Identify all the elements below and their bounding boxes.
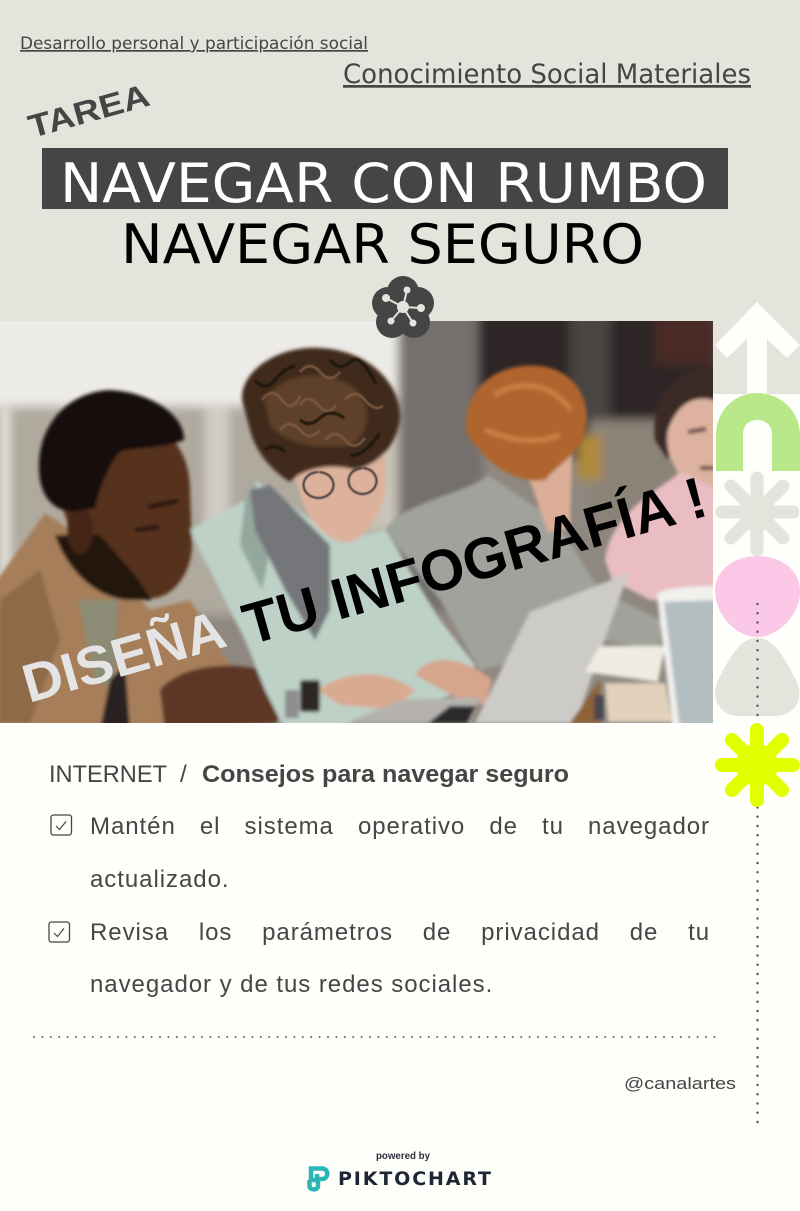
icon: checkbox 1 [51,815,72,835]
subject heading: Desarrollo personal y participación social [20,34,368,54]
tablet [656,584,713,723]
tips heading: Consejos para navegar seguro [202,761,569,788]
redhead woman [385,475,660,670]
tips heading: / [180,761,187,788]
curls [262,366,383,446]
flower network icon [372,276,434,338]
desk and books [570,680,600,723]
section heading: Conocimiento Social Materiales [343,59,751,90]
title bar: NAVEGAR CON RUMBO [60,152,707,215]
decoration: grey blob [715,638,799,716]
tarea label: TAREA [24,77,153,145]
decoration: yellow asterisk [722,730,793,800]
top beige header band [0,0,800,394]
right woman [654,367,720,460]
piktochart wordmark: PIKTOCHART [338,1168,491,1190]
tips heading: INTERNET [49,761,167,788]
decoration: pink blob [715,556,800,637]
vertical dotted line [756,604,759,1127]
woman's turtleneck [250,485,330,640]
tip 1 line 2: actualizado. [90,866,230,893]
tip 2 line 1: Revisa los parámetros de privacidad de tu [90,919,710,946]
tip 1 line 1: Mantén el sistema operativo de tu navegador [90,813,710,840]
glasses [303,468,376,498]
photo caption: tu infografia: TU INFOGRAFÍA ! [236,465,713,658]
photo caption: disena: DISEÑA [16,600,232,715]
man's face [60,429,192,598]
man's hand [158,663,280,723]
woman's shirt [190,480,475,730]
horizontal dotted line [34,1036,720,1038]
decoration: grey asterisk [722,478,793,550]
handle credit: @canalartes [624,1074,736,1093]
man's jacket [0,513,260,730]
icon: piktochart logo [310,1168,327,1189]
powered by label: powered by [376,1151,430,1162]
tip 2 line 2: navegador y de tus redes sociales. [90,971,493,998]
woman's face [292,445,385,543]
decoration: green arch [716,393,800,471]
subtitle: NAVEGAR SEGURO [121,213,644,276]
laptop [475,573,629,723]
woman's hands and watch [318,674,415,710]
icon: checkbox 2 [49,922,70,942]
woman's curly hair [242,348,400,482]
photo: students working at a laptop [0,310,720,730]
decoration: white arrow [715,302,800,395]
